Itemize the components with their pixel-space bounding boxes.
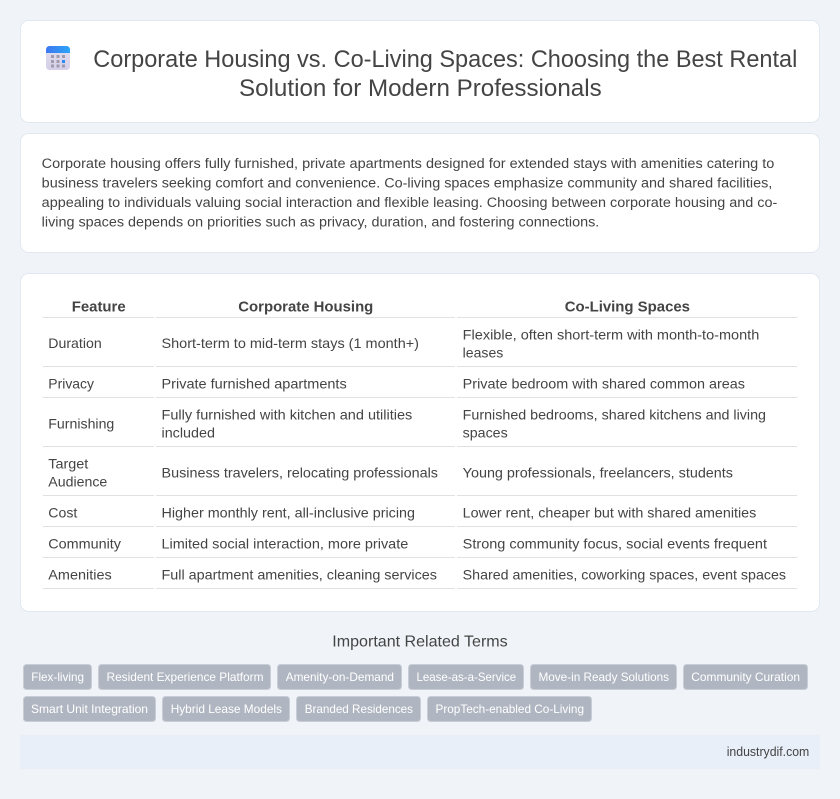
panel: header <box>20 20 820 122</box>
tag: proptech-enabled co-living: PropTech-enabled Co-Living <box>436 702 584 716</box>
tag: move-in ready solutions <box>530 664 676 690</box>
row: duration: Duration <box>48 335 102 351</box>
title: Solution for Modern Professionals <box>239 75 602 102</box>
footer <box>20 735 820 769</box>
row: privacy: Private bedroom with shared common areas <box>463 375 745 391</box>
row: amenities: Amenities <box>48 566 112 582</box>
row: privacy <box>48 375 745 391</box>
tag: branded residences <box>296 696 420 722</box>
table header row: Corporate Housing <box>238 298 373 315</box>
heading: important related terms: Important Related Terms <box>332 634 508 651</box>
text block: introduction paragraph: appealing to individuals valuing social interaction and flexible leasing. Choosing between corporate housing and co- <box>42 195 778 211</box>
tag: amenity-on-demand <box>278 664 402 690</box>
row: amenities <box>48 566 786 582</box>
row: duration: leases <box>463 344 503 360</box>
row: duration: Short-term to mid-term stays (1 month+) <box>162 335 419 351</box>
row: target audience: Audience <box>48 473 108 489</box>
row: amenities: Shared amenities, coworking spaces, event spaces <box>463 566 786 582</box>
table header row: Feature <box>72 298 126 315</box>
tag: resident experience platform: Resident Experience Platform <box>106 670 264 684</box>
row: duration: Flexible, often short-term with month-to-month <box>463 326 759 342</box>
footer: industrydif.com <box>727 744 809 759</box>
row: furnishing: Fully furnished with kitchen and utilities <box>162 406 412 422</box>
row: community: Strong community focus, social events frequent <box>463 535 767 551</box>
row: cost: Higher monthly rent, all-inclusive pricing <box>162 504 415 520</box>
tag: proptech-enabled co-living <box>428 696 592 722</box>
tag: branded residences: Branded Residences <box>305 702 413 716</box>
row: community: Community <box>48 535 121 551</box>
tag: move-in ready solutions: Move-in Ready Solutions <box>538 670 669 684</box>
title <box>93 46 797 102</box>
tag: community curation <box>684 664 808 690</box>
tag: hybrid lease models: Hybrid Lease Models <box>171 702 282 716</box>
panel: introduction <box>20 134 820 252</box>
table header row: Co-Living Spaces <box>565 298 690 315</box>
row: furnishing: included <box>162 424 215 440</box>
table header row <box>72 298 690 315</box>
row: duration <box>48 326 759 360</box>
tag: hybrid lease models <box>162 696 290 722</box>
tag: lease-as-a-service <box>408 664 524 690</box>
panel: comparison table <box>20 274 820 612</box>
text block: introduction paragraph: Corporate housing offers fully furnished, private apartments designed for extended stays with amenities catering to <box>42 156 774 172</box>
row: target audience: Young professionals, freelancers, students <box>463 464 733 480</box>
text block: introduction paragraph <box>42 156 778 230</box>
related terms tags <box>24 664 808 722</box>
row: privacy: Private furnished apartments <box>162 375 347 391</box>
row: furnishing <box>48 406 766 440</box>
tag: community curation: Community Curation <box>691 670 800 684</box>
row: target audience: Business travelers, relocating professionals <box>162 464 438 480</box>
row: furnishing: Furnished bedrooms, shared kitchens and living <box>463 406 766 422</box>
tag: amenity-on-demand: Amenity-on-Demand <box>286 670 394 684</box>
tag: smart unit integration: Smart Unit Integration <box>31 702 148 716</box>
text block: introduction paragraph: living spaces depends on priorities such as privacy, duration, and fostering connections. <box>42 214 599 230</box>
row: furnishing: spaces <box>463 424 508 440</box>
tag: flex-living <box>24 664 92 690</box>
row: community <box>48 535 767 551</box>
icon: calendar <box>46 46 70 70</box>
row: cost: Cost <box>48 504 77 520</box>
tag: smart unit integration <box>24 696 156 722</box>
row: target audience <box>48 455 733 489</box>
row: community: Limited social interaction, more private <box>162 535 409 551</box>
tag: flex-living: Flex-living <box>31 670 84 684</box>
row: furnishing: Furnishing <box>48 415 114 431</box>
tag: resident experience platform <box>98 664 270 690</box>
row: amenities: Full apartment amenities, cleaning services <box>162 566 437 582</box>
row: target audience: Target <box>48 455 88 471</box>
text block: introduction paragraph: business travelers seeking comfort and convenience. Co-living spaces emphasize community and shared facilities, <box>42 175 772 191</box>
row: cost: Lower rent, cheaper but with shared amenities <box>463 504 756 520</box>
row: privacy: Privacy <box>48 375 94 391</box>
tag: lease-as-a-service: Lease-as-a-Service <box>416 670 517 684</box>
row: cost <box>48 504 756 520</box>
title: Corporate Housing vs. Co-Living Spaces: Choosing the Best Rental <box>93 46 797 73</box>
